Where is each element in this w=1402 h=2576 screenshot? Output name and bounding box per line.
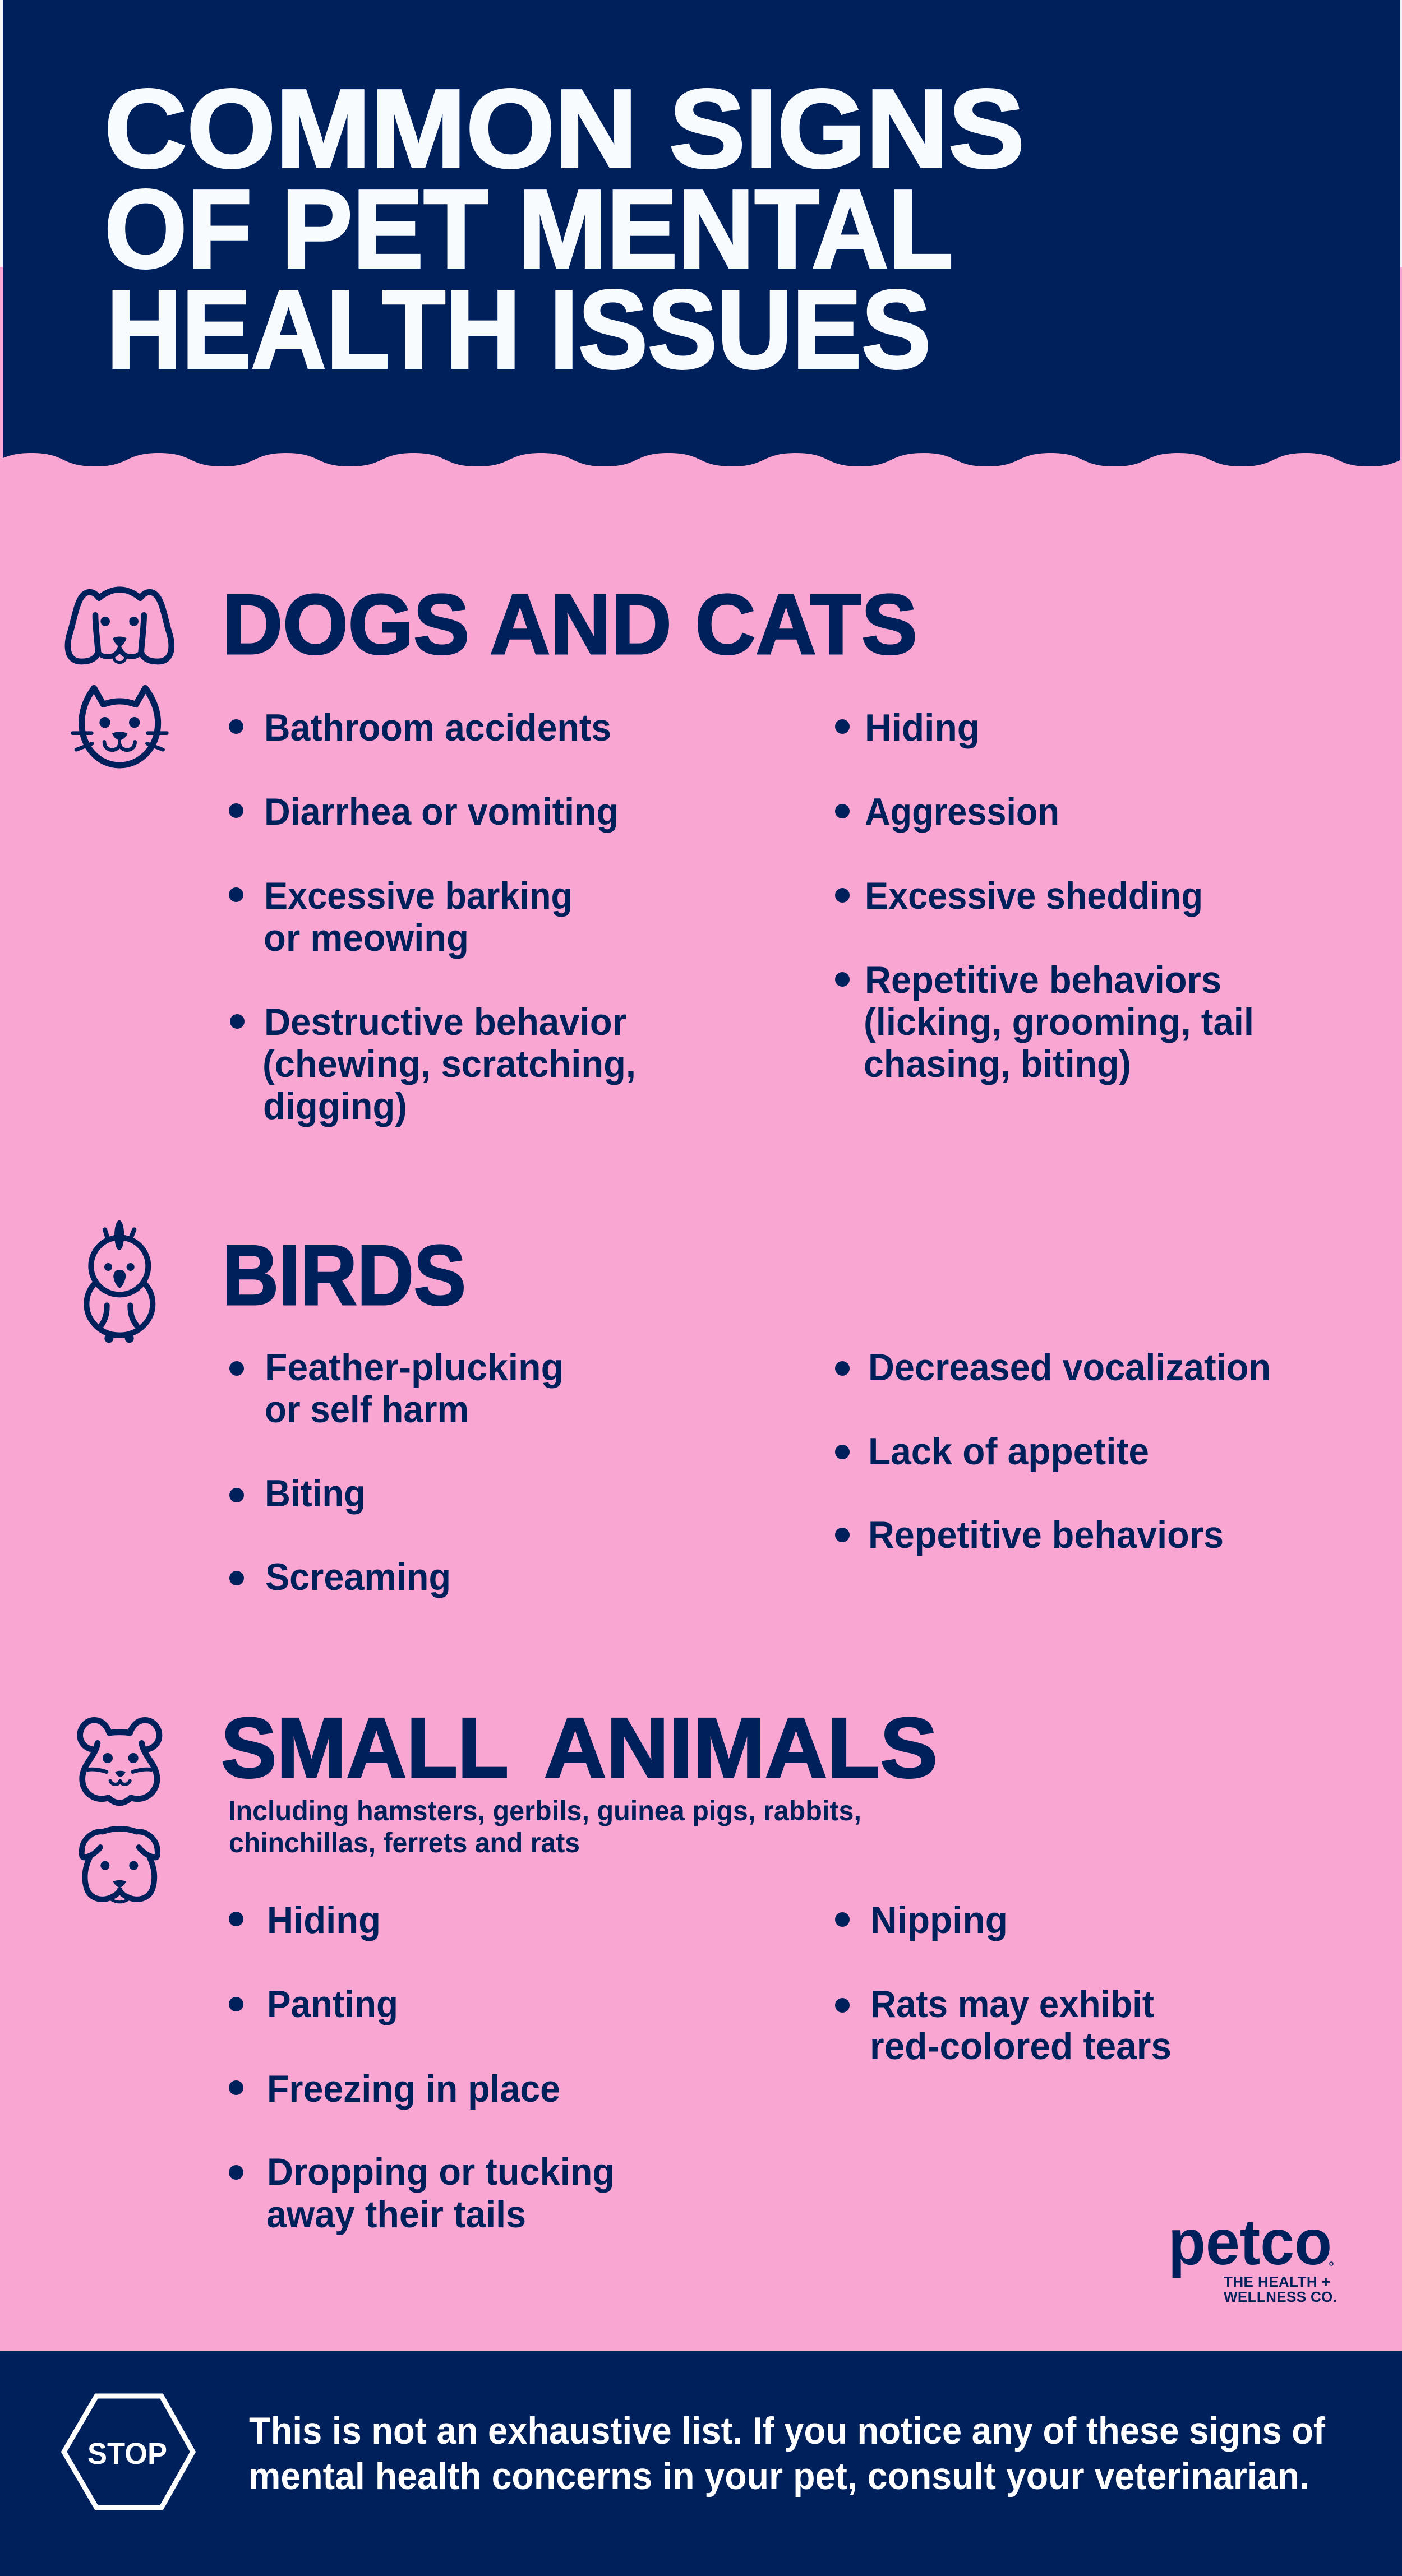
header panel with wavy edge: [0, 0, 1402, 466]
heading: dogs and cats: DOGS AND CATS: [222, 577, 917, 672]
list: dogs and cats left column: digging): [263, 1085, 407, 1127]
list: birds left column: [229, 1346, 564, 1598]
logo: petco: WELLNESS CO.: [1224, 2288, 1337, 2305]
title: COMMON SIGNS: [104, 67, 1025, 191]
list: dogs and cats left column: or meowing: [264, 917, 469, 959]
heading: birds: BIRDS: [222, 1228, 466, 1323]
heading: small animals: SMALL: [221, 1700, 509, 1796]
list: dogs and cats left column: [229, 706, 636, 1127]
list: birds left column: Screaming: [265, 1556, 451, 1598]
icon: cat: [72, 688, 167, 765]
list: birds right column: Repetitive behaviors: [868, 1514, 1224, 1556]
list: small animals left column: Panting: [267, 1983, 398, 2025]
footer panel: [0, 2351, 1402, 2576]
list: small animals right column: [835, 1899, 1172, 2068]
list: dogs and cats right column: Excessive shedding: [865, 875, 1203, 917]
icon: guinea pig: [82, 1829, 158, 1902]
logo: petco: THE HEALTH +: [1224, 2273, 1330, 2290]
subheading: species: [228, 1795, 861, 1858]
icon: hamster: [80, 1720, 159, 1803]
list: birds right column: Lack of appetite: [868, 1430, 1149, 1473]
list: small animals left column: Hiding: [267, 1899, 381, 1941]
heading: small animals: ANIMALS: [544, 1700, 938, 1796]
icon: dog: [68, 590, 172, 663]
heading: small animals: [221, 1700, 938, 1796]
title: HEALTH ISSUES: [107, 267, 931, 392]
list: small animals right column: Rats may exhibit: [870, 1983, 1154, 2025]
subheading: species: Including hamsters, gerbils, guinea pigs, rabbits,: [228, 1795, 861, 1826]
title: [104, 67, 1025, 392]
list: dogs and cats left column: Excessive barking: [264, 875, 573, 917]
footer note: [248, 2409, 1325, 2498]
list: birds left column: Biting: [265, 1472, 366, 1515]
list: birds left column: or self harm: [265, 1388, 469, 1431]
subheading: species: chinchillas, ferrets and rats: [229, 1827, 580, 1858]
footer note: mental health concerns in your pet, consult your veterinarian.: [248, 2455, 1309, 2498]
panel: dogs and cats: [68, 577, 1254, 1127]
list: birds right column: Decreased vocalization: [868, 1346, 1271, 1389]
list: small animals left column: away their tails: [266, 2193, 526, 2236]
list: birds left column: Feather-plucking: [265, 1346, 564, 1389]
list: dogs and cats right column: chasing, biting): [864, 1043, 1131, 1085]
icon: stop sign: STOP: [87, 2437, 167, 2471]
list: small animals right column: red-colored tears: [870, 2025, 1172, 2068]
panel: small animals: [80, 1700, 1172, 2236]
list: dogs and cats right column: Repetitive behaviors: [865, 959, 1221, 1001]
list: dogs and cats right column: Hiding: [865, 706, 980, 749]
list: small animals left column: Freezing in place: [267, 2068, 560, 2110]
icon: stop sign: [64, 2396, 193, 2508]
list: dogs and cats right column: [835, 706, 1254, 1085]
list: small animals left column: [229, 1899, 615, 2236]
list: dogs and cats left column: Bathroom accidents: [264, 706, 611, 749]
title: OF PET MENTAL: [104, 167, 953, 292]
panel: birds: [86, 1220, 1271, 1598]
list: dogs and cats right column: (licking, grooming, tail: [864, 1001, 1254, 1043]
list: dogs and cats left column: Diarrhea or vomiting: [264, 790, 619, 833]
list: birds right column: [835, 1346, 1271, 1556]
footer note: This is not an exhaustive list. If you notice any of these signs of: [249, 2409, 1325, 2452]
list: dogs and cats right column: Aggression: [865, 790, 1059, 833]
header background: [0, 0, 1402, 466]
list: dogs and cats left column: Destructive behavior: [264, 1001, 626, 1043]
list: small animals right column: Nipping: [870, 1899, 1008, 1941]
logo: petco: petco: [1168, 2207, 1332, 2278]
icon: bird: [86, 1220, 153, 1343]
list: dogs and cats left column: (chewing, scratching,: [262, 1043, 636, 1085]
list: small animals left column: Dropping or tucking: [267, 2150, 615, 2193]
